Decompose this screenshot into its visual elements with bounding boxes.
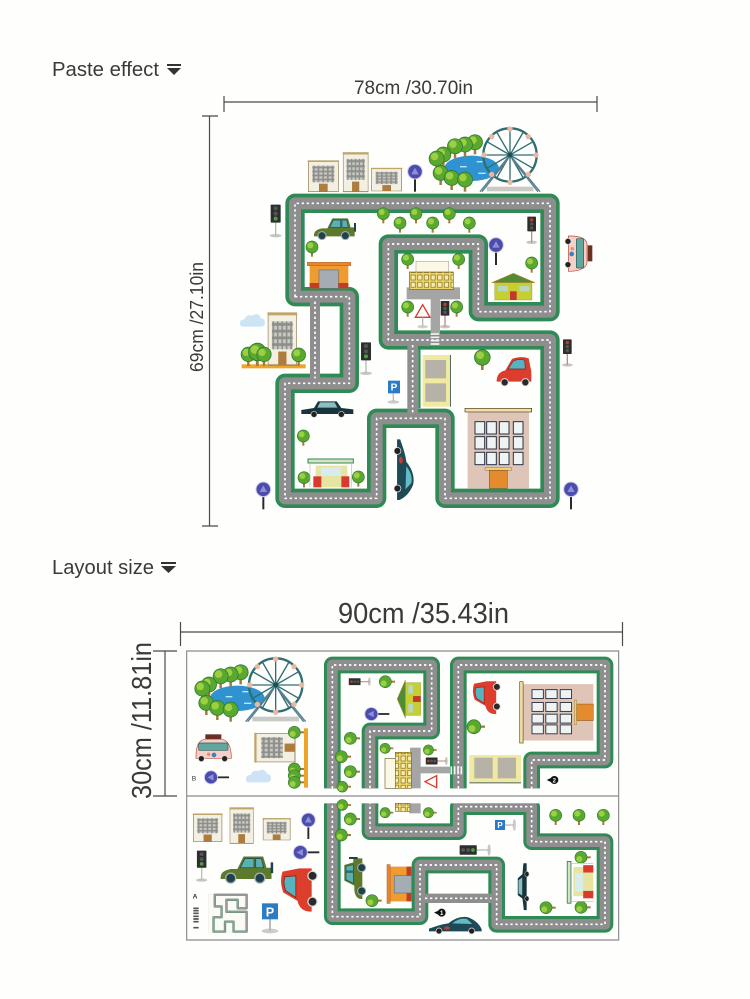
orange garage — [307, 262, 351, 288]
ferris wheel and lake park — [429, 126, 540, 192]
sheet outline — [187, 651, 619, 940]
gas station rotated — [567, 861, 593, 903]
red car — [497, 357, 531, 386]
parking sign rotated — [495, 819, 516, 831]
large red car — [281, 868, 317, 912]
jeep — [314, 218, 356, 240]
width dimension: 90cm: 90cm /35.43in — [338, 598, 509, 630]
heading: layout size: Layout size — [52, 557, 154, 579]
lower sheet roads — [332, 802, 605, 924]
trees — [297, 208, 538, 487]
width dimension: 78cm — [224, 78, 597, 112]
yellow garage lot — [423, 355, 451, 407]
parking sign sticker: P — [266, 905, 275, 919]
sheet label B: B — [192, 775, 197, 782]
rotated building with trees — [254, 726, 308, 788]
thumbnail of assembled map — [208, 894, 247, 932]
sports car — [394, 439, 414, 500]
parking sign sticker — [262, 903, 278, 933]
width dimension: 78cm: 78cm /30.70in — [354, 78, 473, 99]
trees — [335, 676, 609, 914]
school with forecourt — [407, 261, 460, 344]
number marker 2 — [547, 776, 558, 784]
width dimension: 90cm — [180, 598, 622, 646]
limousine rotated — [518, 863, 529, 910]
upper sheet roads — [332, 665, 605, 788]
cloud — [246, 770, 271, 782]
left building, trees and cloud — [240, 312, 306, 368]
orange garage rotated — [387, 864, 412, 903]
city buildings row — [308, 152, 402, 192]
parking sign — [387, 381, 400, 404]
green roof house — [397, 680, 421, 718]
jeep rotated — [344, 857, 366, 899]
green roof house — [492, 273, 535, 300]
school upper half — [385, 748, 461, 788]
road network — [285, 203, 550, 498]
gas station — [308, 459, 353, 487]
large apartment rotated — [520, 682, 593, 743]
height dimension: 69cm — [187, 116, 218, 526]
large apartment building — [465, 408, 532, 488]
height dimension: 30cm: 30cm /11.81in — [126, 642, 157, 799]
heading: paste effect: Paste effect — [52, 59, 159, 81]
black limousine — [301, 401, 353, 417]
infographic canvas — [54, 61, 624, 941]
red car rotated — [473, 681, 500, 714]
panel: sticker sheet layout — [187, 651, 619, 940]
sheet label A and barcode — [193, 893, 199, 928]
parking sign rotated: P — [497, 821, 503, 830]
van — [565, 236, 592, 271]
number marker 2: 2 — [553, 778, 557, 784]
number marker 1: 1 — [440, 911, 444, 917]
traffic lights — [196, 677, 491, 882]
sheet label A and barcode: A — [193, 893, 198, 900]
height dimension: 30cm — [126, 642, 177, 799]
number marker 1 — [434, 909, 446, 917]
signs — [204, 707, 389, 859]
van — [196, 734, 231, 762]
jeep — [221, 856, 273, 883]
apartment stickers — [193, 807, 291, 843]
round road signs — [256, 164, 578, 509]
parking sign: P — [391, 383, 398, 394]
panel: assembled road map sticker — [240, 126, 592, 509]
sports car — [429, 917, 482, 934]
height dimension: 69cm: 69cm /27.10in — [187, 262, 207, 372]
yellow garage rotated — [469, 755, 521, 783]
school lower half — [395, 803, 421, 813]
ferris wheel and lake park — [195, 656, 306, 722]
traffic lights — [270, 205, 573, 375]
